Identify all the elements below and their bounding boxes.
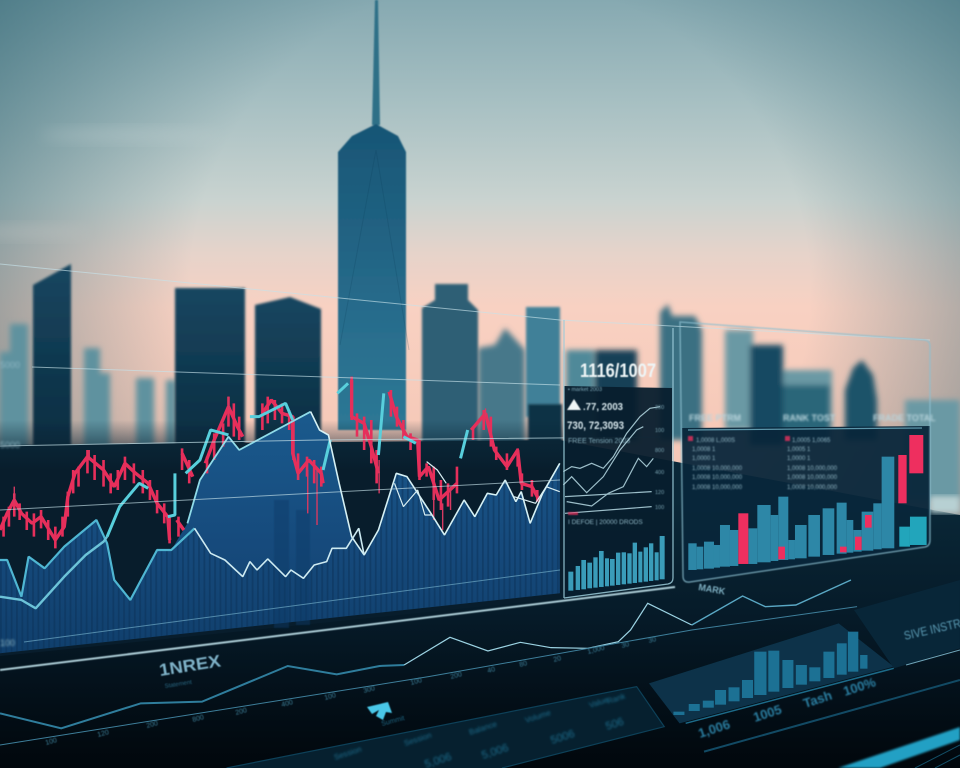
table rows bbox=[688, 436, 838, 491]
index label: Statement bbox=[164, 680, 193, 690]
index label bbox=[158, 651, 223, 690]
icon: up arrow: Summit bbox=[381, 715, 405, 728]
vertical axis line bbox=[22, 265, 24, 645]
mark label: MARK bbox=[698, 582, 726, 597]
lower table text: Volume bbox=[524, 708, 553, 725]
lower table text bbox=[333, 691, 627, 768]
axis tick labels: 800 bbox=[192, 714, 205, 724]
header labels bbox=[689, 413, 936, 423]
lower table text: 5,006 bbox=[480, 742, 510, 762]
header labels: FRADE TOTAL bbox=[873, 413, 936, 423]
panel: lower right bbox=[854, 580, 960, 668]
bar chart bbox=[688, 435, 927, 570]
legend row: I DEFOE | 20000 DRODS bbox=[568, 519, 643, 526]
right axis labels: 200 bbox=[655, 405, 664, 411]
lower bar chart labels: 1005 bbox=[751, 702, 783, 725]
trend line bbox=[0, 580, 857, 745]
axis tick labels: 200 bbox=[235, 707, 248, 717]
panel: lower bar chart bbox=[649, 623, 960, 752]
table rows: 1,0008 10,000,000 bbox=[692, 485, 743, 491]
header labels: FREE PTRM bbox=[689, 413, 741, 423]
lower bar chart labels: Tash bbox=[801, 687, 834, 711]
lower screen: panels and trend line bbox=[0, 580, 960, 768]
lower bar chart labels: 100% bbox=[841, 674, 878, 699]
lower table text: Balance bbox=[468, 719, 499, 737]
heading value: 1116/1007 bbox=[580, 361, 656, 382]
table rows: 1,0008 10,000,000 bbox=[787, 466, 838, 472]
axis tick labels: 200 bbox=[146, 720, 159, 730]
axis tick labels: 300 bbox=[363, 685, 376, 695]
lower table text: Session bbox=[403, 731, 433, 748]
value rows: ▪ market 2003 bbox=[568, 387, 602, 393]
table rows: 1,0008 1 bbox=[692, 447, 716, 453]
right axis labels: 100 bbox=[655, 505, 664, 511]
volume bars bbox=[568, 536, 665, 591]
axis tick labels: 120 bbox=[97, 729, 110, 739]
icon: up arrow bbox=[367, 702, 405, 728]
axis tick labels: 100 bbox=[324, 692, 337, 702]
right axis labels: 400 bbox=[655, 470, 664, 476]
axis tick labels: 20 bbox=[553, 655, 562, 664]
axis tick labels: 40 bbox=[487, 666, 496, 675]
thin wicks bbox=[14, 397, 486, 530]
lower table text: 5006 bbox=[549, 728, 576, 747]
right axis labels: 800 bbox=[655, 448, 664, 454]
table rows: 1,0008 10,000,000 bbox=[787, 485, 838, 491]
table rows: 1,0008 10,000,000 bbox=[692, 475, 743, 481]
axis tick labels: 80 bbox=[519, 660, 528, 669]
value rows: 730, 72,3093 bbox=[567, 420, 624, 432]
red candles bbox=[0, 377, 539, 548]
panel: side summary bbox=[563, 320, 673, 598]
background volume bars bbox=[274, 500, 310, 628]
right axis labels bbox=[655, 405, 664, 511]
right axis labels: 100 bbox=[655, 428, 664, 434]
axis tick labels: 100 bbox=[410, 677, 423, 687]
cyan streak bbox=[838, 727, 960, 768]
axis tick labels bbox=[45, 636, 657, 747]
table rows: 1,0005 1,0065 bbox=[792, 438, 831, 444]
bright horizon strip bbox=[930, 496, 960, 513]
central tower bbox=[338, 0, 406, 430]
value rows bbox=[567, 387, 630, 445]
cyan candles bbox=[107, 383, 468, 537]
panel: lower table bbox=[227, 687, 664, 768]
index label: 1NREX bbox=[158, 651, 223, 680]
light blue line series bbox=[0, 412, 560, 608]
lower table text: 506 bbox=[604, 716, 625, 733]
table rows: 1,0000 1 bbox=[692, 456, 716, 462]
axis tick labels: 200 bbox=[450, 671, 463, 681]
bottom frame line bbox=[0, 587, 675, 670]
line chart bbox=[563, 407, 660, 513]
table rows: 1,0000 1 bbox=[787, 456, 811, 462]
axis labels: 100 bbox=[0, 638, 15, 648]
lower table text: Session bbox=[333, 745, 363, 762]
table rows: 1,0008 10,000,000 bbox=[787, 475, 838, 481]
value rows: .77, 2003 bbox=[583, 402, 623, 413]
table rows: 1,0008 10,000,000 bbox=[692, 466, 743, 472]
panel: dashboard bbox=[680, 322, 936, 582]
skyline buildings bbox=[0, 0, 960, 500]
blue area chart bbox=[0, 412, 560, 653]
dark ground and lower screen bbox=[0, 440, 960, 768]
lower table text: Rank bbox=[606, 691, 627, 706]
value rows: FREE Tension 2003 bbox=[568, 438, 630, 445]
axis labels: 5000 bbox=[0, 360, 20, 370]
dark panel backing bbox=[0, 420, 563, 656]
axis tick labels: 100 bbox=[45, 737, 58, 747]
lower bar chart labels: 1,006 bbox=[696, 717, 732, 741]
lower table text: Value bbox=[588, 695, 610, 710]
header labels: RANK TOST bbox=[783, 413, 836, 423]
axis tick labels: 1,000 bbox=[587, 645, 606, 656]
grid lines bbox=[0, 264, 930, 642]
main chart panel bbox=[0, 264, 930, 670]
lower bar chart labels bbox=[696, 674, 878, 741]
legend row bbox=[568, 512, 643, 526]
axis tick labels: 30 bbox=[648, 636, 657, 645]
axis tick labels: 30 bbox=[621, 641, 630, 650]
axis tick labels: 400 bbox=[281, 699, 294, 709]
axis labels bbox=[0, 360, 20, 648]
axis labels: 5000 bbox=[0, 440, 20, 450]
candlestick series bbox=[0, 377, 560, 608]
table rows: 1,0008 L,000S bbox=[696, 438, 735, 444]
table rows: 1,0005 1 bbox=[787, 447, 811, 453]
right axis labels: 120 bbox=[655, 490, 664, 496]
